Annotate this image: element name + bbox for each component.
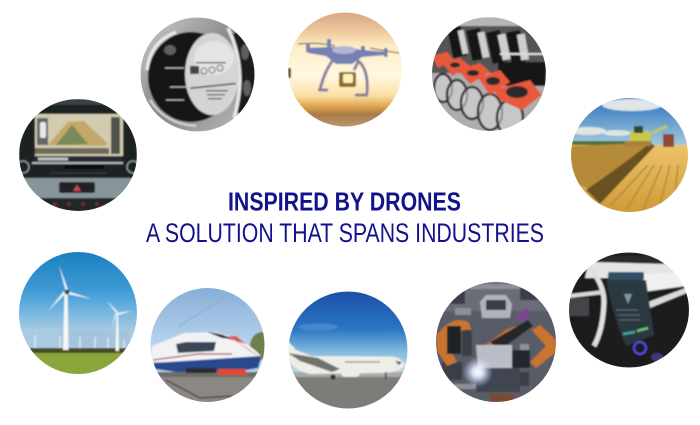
photo circle: car navigation display [17,99,139,212]
photo circle: robotic car assembly line [435,281,557,403]
photo circle: combine harvester in wheat field [570,97,690,213]
photo circle: drone at sunset [287,12,403,128]
subtitle: a solution that spans industries: A SOLUTION THAT SPANS INDUSTRIES [146,218,544,248]
photo circle: wind turbines [18,251,138,377]
photo circle: passenger airplane [288,291,408,410]
photo circle: smart electricity meter [140,17,256,132]
title: inspired by drones: INSPIRED BY DRONES [228,186,461,216]
photo circle: car centre console touchscreen [568,252,690,368]
photo circle: high-speed train [150,288,264,402]
photo circle: bike sharing rack [431,17,547,136]
